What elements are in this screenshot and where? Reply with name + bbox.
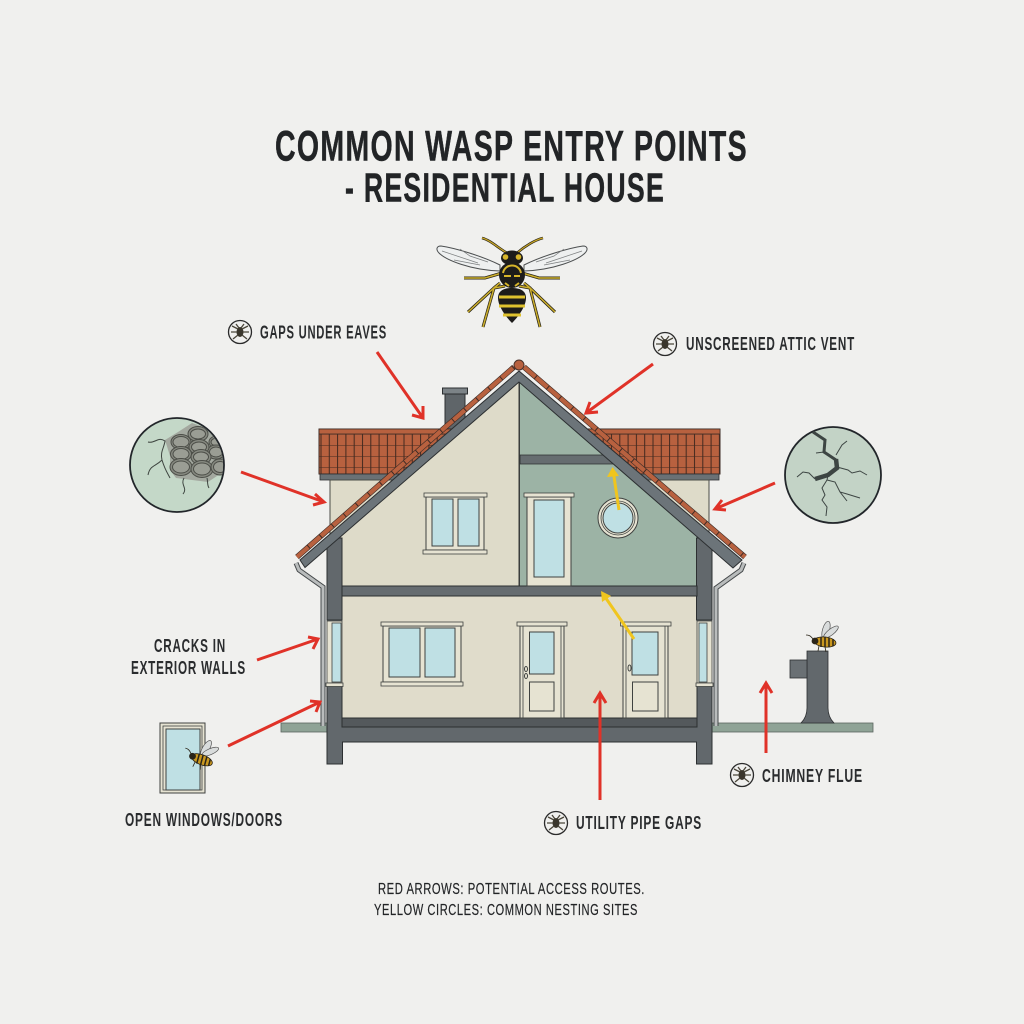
arrow: utility pipes bbox=[594, 693, 606, 800]
gable wall: cream side bbox=[342, 380, 519, 590]
downpipe left bbox=[296, 563, 323, 726]
label: cracks in exterior walls: EXTERIOR WALLS bbox=[131, 658, 246, 678]
attic beam bbox=[520, 455, 617, 464]
panel: wasp nest detail bbox=[130, 418, 229, 512]
arrow: eaves bbox=[377, 352, 423, 418]
arrow: chimney flue bbox=[760, 683, 772, 753]
label: cracks in exterior walls: CRACKS IN bbox=[154, 636, 226, 656]
arrow: right crack bbox=[715, 483, 775, 510]
arrow: open windows bbox=[228, 701, 320, 746]
icon: wasp illustration bbox=[437, 238, 587, 327]
icon: wasp on flue bbox=[806, 620, 840, 652]
round window bbox=[598, 498, 638, 538]
upper side walls bbox=[330, 480, 709, 565]
legend text: YELLOW CIRCLES: COMMON NESTING SITES bbox=[374, 902, 638, 919]
arrow: cracks in walls bbox=[257, 637, 318, 660]
upper window bbox=[423, 493, 487, 554]
ground floor door left bbox=[517, 622, 567, 718]
ground strips bbox=[281, 723, 873, 732]
label: utility pipe gaps bbox=[544, 812, 702, 834]
panel: wall crack detail bbox=[785, 427, 881, 523]
yellow arrow: floor nest bbox=[601, 591, 634, 639]
label: chimney flue bbox=[730, 764, 863, 786]
label: unscreened attic vent bbox=[654, 332, 855, 356]
label: unscreened attic vent: UNSCREENED ATTIC VENT bbox=[686, 334, 855, 354]
legend text: RED ARROWS: POTENTIAL ACCESS ROUTES. bbox=[378, 881, 645, 898]
label: gaps under eaves: GAPS UNDER EAVES bbox=[260, 322, 387, 342]
roof rafters bbox=[300, 371, 742, 568]
legend text bbox=[374, 881, 645, 919]
label: gaps under eaves bbox=[228, 320, 387, 344]
ground floor window bbox=[381, 622, 463, 686]
yellow arrow: attic nest bbox=[607, 467, 619, 510]
ground floor wall bbox=[342, 596, 697, 718]
gable wall: green side bbox=[519, 380, 697, 590]
title bbox=[275, 122, 748, 210]
label: open windows/doors: OPEN WINDOWS/DOORS bbox=[125, 810, 283, 830]
chimney bbox=[442, 388, 468, 442]
arrow: attic vent bbox=[586, 364, 653, 413]
ridge tiles bbox=[297, 360, 745, 557]
label: cracks in exterior walls bbox=[131, 636, 246, 678]
side window right bbox=[696, 621, 713, 686]
gable divider bbox=[518, 380, 520, 590]
upper door bbox=[524, 493, 574, 586]
title: - RESIDENTIAL HOUSE bbox=[345, 164, 665, 210]
title: COMMON WASP ENTRY POINTS bbox=[275, 122, 748, 170]
label: chimney flue: CHIMNEY FLUE bbox=[762, 766, 863, 786]
downpipe right bbox=[716, 563, 744, 726]
chimney flue stack bbox=[790, 651, 834, 723]
panel: house cross-section bbox=[281, 360, 873, 764]
arrow: left nest bbox=[241, 472, 324, 505]
side window left bbox=[326, 621, 343, 686]
structural walls and floors bbox=[327, 538, 712, 764]
icon: open window with wasp bbox=[160, 723, 222, 793]
ground floor door right bbox=[620, 622, 671, 718]
tiled roof sections bbox=[319, 429, 720, 480]
label: utility pipe gaps: UTILITY PIPE GAPS bbox=[576, 813, 702, 833]
